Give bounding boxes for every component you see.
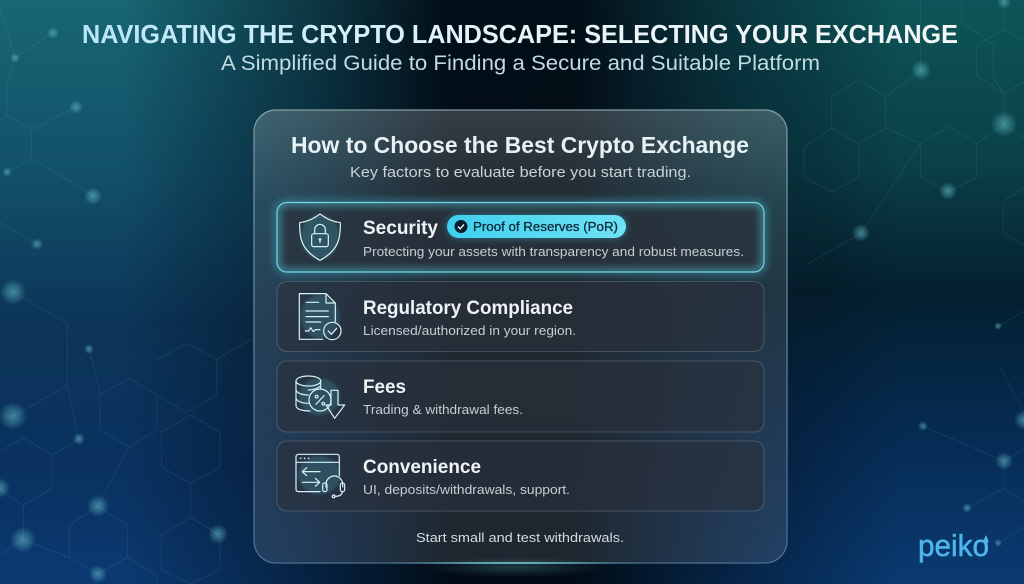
card: regulatory compliance xyxy=(277,282,764,352)
panel heading: How to Choose the Best Crypto Exchange xyxy=(291,132,749,158)
icon: document with check xyxy=(299,294,341,340)
heading: fees: Fees xyxy=(363,377,406,398)
icon: coins percent and down arrow xyxy=(296,376,345,418)
card: convenience xyxy=(277,441,764,511)
description: security: Protecting your assets with transparency and robust measures. xyxy=(363,245,744,259)
subtitle: A Simplified Guide to Finding a Secure and Suitable Platform xyxy=(221,52,820,75)
heading: security: Security xyxy=(363,218,438,239)
card: security xyxy=(277,202,764,272)
icon: shield with lock xyxy=(300,214,340,260)
panel: exchange checklist xyxy=(254,110,787,577)
title: NAVIGATING THE CRYPTO LANDSCAPE: SELECTING YOUR EXCHANGE xyxy=(82,21,958,49)
logo: peiko: peiko xyxy=(918,528,989,563)
description: regulatory compliance: Licensed/authorized in your region. xyxy=(363,324,576,338)
card: fees xyxy=(277,361,764,432)
footer note: Start small and test withdrawals. xyxy=(416,530,624,545)
panel subheading: Key factors to evaluate before you start trading. xyxy=(350,165,691,181)
badge: proof of reserves xyxy=(447,215,626,238)
badge: proof of reserves: Proof of Reserves (PoR) xyxy=(473,220,618,234)
icon: browser window with headset xyxy=(296,454,345,498)
description: convenience: UI, deposits/withdrawals, support. xyxy=(363,483,570,497)
description: fees: Trading & withdrawal fees. xyxy=(363,403,523,417)
heading: regulatory compliance: Regulatory Compliance xyxy=(363,298,573,319)
heading: convenience: Convenience xyxy=(363,457,481,478)
